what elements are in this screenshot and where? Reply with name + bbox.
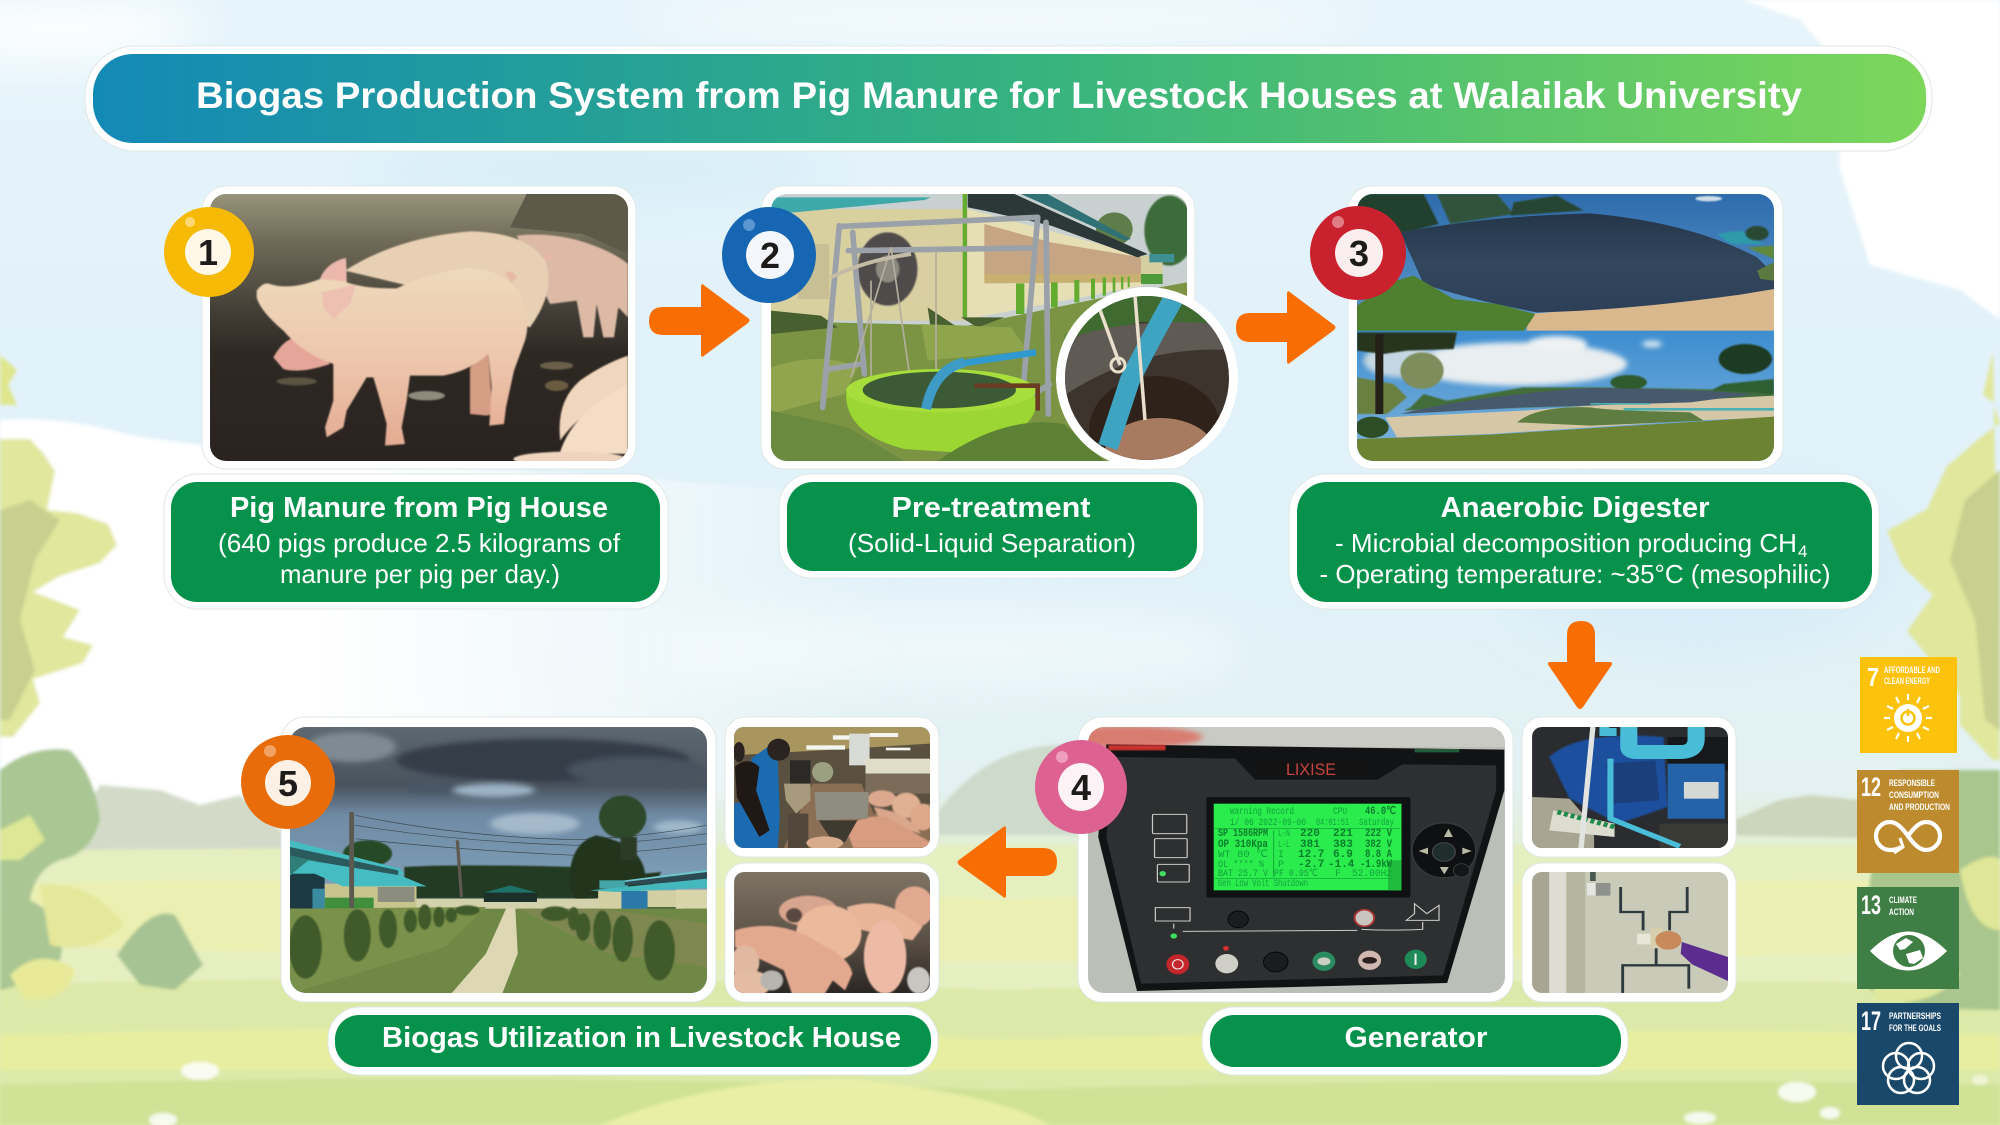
icon: SDG 13 climate action <box>1857 887 1959 989</box>
label: anaerobic digester: 4 <box>1798 542 1807 561</box>
panel: step 2 pre-treatment photo <box>761 186 1238 486</box>
screen readout: 46.0℃ <box>1365 805 1396 818</box>
badge: number 4: 4 <box>1071 767 1091 808</box>
screen readout: SP 1586RPM <box>1218 828 1268 840</box>
icon: SDG 7 affordable and clean energy: CLEAN ENERGY <box>1884 676 1930 686</box>
icon: SDG 13 climate action: 13 <box>1861 890 1881 920</box>
icon: SDG 17 partnerships for the goals: PARTNERSHIPS <box>1889 1011 1941 1022</box>
screen readout: 1/ 06 2022-09-06 <box>1230 817 1306 829</box>
label: pre-treatment <box>779 474 1204 578</box>
screen readout: P <box>1278 860 1284 871</box>
label: generator <box>1202 1007 1628 1075</box>
panel: step 5 farm landscape photo <box>281 717 716 1002</box>
screen readout: 221 <box>1333 828 1353 840</box>
label: pre-treatment: Pre-treatment <box>892 492 1091 524</box>
screen readout: 381 <box>1300 839 1320 851</box>
icon: SDG 7 affordable and clean energy <box>1860 657 1957 753</box>
badge: number 5 <box>241 735 335 829</box>
screen readout: 220 <box>1300 828 1320 840</box>
trees right <box>1887 351 2000 760</box>
icon: SDG 12 responsible consumption: RESPONSIBLE <box>1889 778 1935 789</box>
label: biogas utilization: Biogas Utilization in Livestock House <box>382 1022 901 1054</box>
panel: step 1 pig house photo <box>202 186 636 469</box>
screen readout: Gen Low Volt Shutdown <box>1218 878 1308 890</box>
icon: SDG 12 responsible consumption: 12 <box>1861 772 1881 802</box>
sky clouds <box>1743 0 2000 320</box>
label: pig manure <box>164 474 668 609</box>
flowers <box>149 1062 1988 1125</box>
screen readout: 383 <box>1333 839 1353 851</box>
screen readout: CPU <box>1333 807 1347 818</box>
label: pre-treatment: (Solid-Liquid Separation) <box>848 528 1136 558</box>
screen readout: Warning Record <box>1230 806 1294 818</box>
title banner: Biogas Production System from Pig Manure for Livestock Houses at Walailak University <box>196 75 1802 116</box>
panel: pig house small photo with visitors <box>725 717 939 857</box>
screen readout: 12.7 <box>1298 849 1324 861</box>
icon: SDG 17 partnerships for the goals: 17 <box>1861 1006 1881 1036</box>
icon: SDG 12 responsible consumption: CONSUMPTION <box>1889 790 1939 801</box>
screen readout: 52.00Hz <box>1352 869 1392 880</box>
screen readout: 222 V <box>1365 828 1392 840</box>
label: anaerobic digester <box>1289 474 1879 609</box>
screen readout: F <box>1335 869 1341 880</box>
icon: SDG 13 climate action: ACTION <box>1889 907 1914 918</box>
icon: SDG 13 climate action: CLIMATE <box>1889 895 1917 906</box>
screen readout: 04:01:51 <box>1316 818 1349 829</box>
screen readout: PF 0.95℃ <box>1274 869 1318 880</box>
label: anaerobic digester: Anaerobic Digester <box>1440 492 1710 524</box>
arrow: step 1 to 2 <box>649 284 750 357</box>
label: biogas utilization <box>328 1007 938 1075</box>
screen readout: -2.7 <box>1298 859 1324 871</box>
badge: number 3 <box>1310 206 1406 300</box>
screen readout: OL **** % <box>1218 859 1264 871</box>
badge: number 5: 5 <box>278 763 298 804</box>
label: pig manure: Pig Manure from Pig House <box>230 492 608 524</box>
arrow: step 4 to 5 <box>958 826 1057 898</box>
screen readout: -1.9kW <box>1360 859 1392 871</box>
icon: SDG 17 partnerships for the goals: FOR THE GOALS <box>1889 1023 1941 1034</box>
screen readout: BAT 25.7 V <box>1218 869 1268 880</box>
label: pig manure: manure per pig per day.) <box>280 559 560 589</box>
badge: number 2 <box>722 207 816 303</box>
title banner <box>85 46 1932 151</box>
screen readout: Saturday <box>1359 817 1394 829</box>
icon: SDG 7 affordable and clean energy: 7 <box>1867 662 1879 692</box>
trees left <box>0 355 17 405</box>
badge: number 3: 3 <box>1349 233 1369 274</box>
badge: number 1: 1 <box>198 232 218 273</box>
screen readout: 382 V <box>1365 839 1392 851</box>
screen readout: -1.4 <box>1328 859 1355 871</box>
panel: pigs small photo <box>725 863 939 1002</box>
arrow: step 2 to 3 <box>1236 291 1336 364</box>
screen readout: L-L <box>1278 840 1290 851</box>
label: anaerobic digester: - Operating temperature: ~35°C (mesophilic) <box>1320 559 1830 589</box>
screen readout: 6.9 <box>1333 849 1353 861</box>
label: anaerobic digester: - Microbial decomposition producing CH <box>1335 528 1797 558</box>
arrow: step 3 to 4 <box>1548 621 1612 709</box>
screen readout: OP 310Kpa <box>1218 839 1268 851</box>
screen readout: WT 80 ℃ <box>1218 850 1268 861</box>
screen readout: I <box>1278 850 1284 861</box>
screen readout: L-N <box>1278 829 1290 840</box>
brand plate: LIXISE <box>1286 760 1336 779</box>
label: generator: Generator <box>1344 1022 1488 1054</box>
inset photo: inside of separation well <box>1056 287 1238 486</box>
panel: generator control panel photo <box>1047 717 1513 1002</box>
screen readout <box>1218 805 1396 890</box>
panel: switch wiring small photo <box>1522 863 1736 1002</box>
badge: number 2: 2 <box>760 235 780 276</box>
icon: SDG 17 partnerships for the goals <box>1857 1003 1959 1105</box>
panel: generator engine small photo <box>1522 717 1736 857</box>
icon: SDG 12 responsible consumption: AND PRODUCTION <box>1889 802 1950 813</box>
distant hills <box>60 785 340 850</box>
icon: SDG 12 responsible consumption <box>1857 770 1959 873</box>
screen readout: 8.8 A <box>1365 849 1392 861</box>
badge: number 4 <box>1035 740 1127 834</box>
field <box>0 845 2000 1125</box>
panel: step 3 anaerobic digester photos <box>1348 186 1783 469</box>
badge: number 1 <box>164 207 254 297</box>
icon: SDG 7 affordable and clean energy: AFFORDABLE AND <box>1884 665 1940 675</box>
label: pig manure: (640 pigs produce 2.5 kilograms of <box>218 528 621 558</box>
